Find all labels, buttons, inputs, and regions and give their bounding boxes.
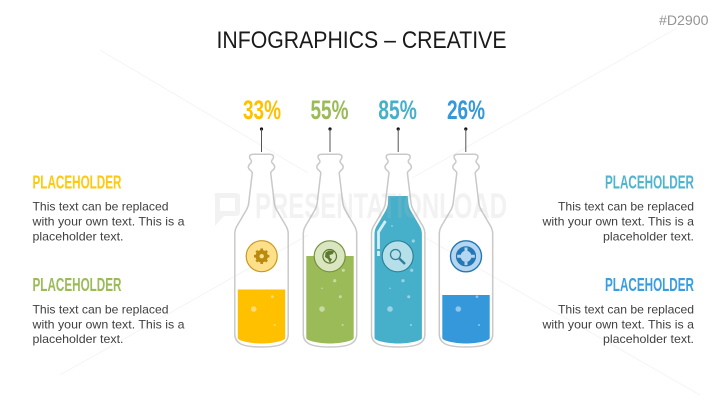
- bubbles: [387, 225, 415, 326]
- pointer: [397, 127, 400, 152]
- liquid: [306, 256, 354, 344]
- icon: magnifier: [382, 241, 413, 272]
- pointer: [260, 127, 263, 152]
- percentage value: 85%: [378, 95, 417, 125]
- bottle outline: [372, 154, 425, 347]
- heading: PLACEHOLDER: [32, 171, 122, 192]
- liquid: [374, 196, 422, 344]
- body text: placeholder text.: [32, 332, 124, 346]
- body text: [541, 200, 694, 243]
- pointer: [464, 127, 467, 152]
- bottle outline: [439, 154, 493, 347]
- bottle 3: 85 percent teal: [372, 95, 425, 347]
- bubbles: [456, 295, 480, 326]
- heading: PLACEHOLDER: [32, 274, 122, 295]
- body text: with your own text. This is a: [541, 317, 694, 331]
- body text: with your own text. This is a: [31, 215, 185, 229]
- glass highlight: [378, 221, 386, 256]
- body text: [31, 302, 185, 346]
- liquid: [238, 290, 285, 344]
- body text: [31, 200, 185, 243]
- body text: placeholder text.: [32, 229, 124, 243]
- bubbles: [319, 269, 345, 326]
- body text: placeholder text.: [603, 332, 694, 346]
- body text: with your own text. This is a: [541, 215, 694, 229]
- pointer: [328, 127, 332, 152]
- bubbles: [251, 295, 276, 326]
- percentage value: 55%: [310, 95, 348, 125]
- icon: lifebuoy: [450, 241, 482, 272]
- panel: left bottom text: [31, 274, 185, 346]
- body text: with your own text. This is a: [31, 317, 185, 331]
- bottle outline: [235, 154, 288, 347]
- bottle 4: 26 percent blue: [439, 95, 493, 347]
- liquid: [442, 295, 490, 344]
- product code: #D2900: [659, 13, 708, 28]
- percentage value: 33%: [243, 95, 281, 125]
- percentage value: 26%: [447, 95, 485, 125]
- watermark: PRESENTATIONLOAD: [255, 187, 507, 226]
- body text: This text can be replaced: [558, 200, 694, 214]
- body text: This text can be replaced: [32, 302, 168, 316]
- panel: right top text: [541, 171, 694, 243]
- body text: placeholder text.: [603, 229, 694, 243]
- icon: globe: [314, 241, 345, 272]
- icon: gear: [246, 241, 277, 272]
- panel: left top text: [31, 171, 185, 243]
- title: INFOGRAPHICS – CREATIVE: [216, 27, 506, 54]
- bottle outline: [303, 154, 357, 347]
- body text: This text can be replaced: [32, 200, 168, 214]
- body text: [541, 302, 694, 346]
- bottle 2: 55 percent green: [303, 95, 357, 347]
- panel: right bottom text: [541, 274, 694, 346]
- body text: This text can be replaced: [558, 302, 694, 316]
- watermark: [214, 187, 507, 226]
- bottle 1: 33 percent yellow: [235, 95, 288, 347]
